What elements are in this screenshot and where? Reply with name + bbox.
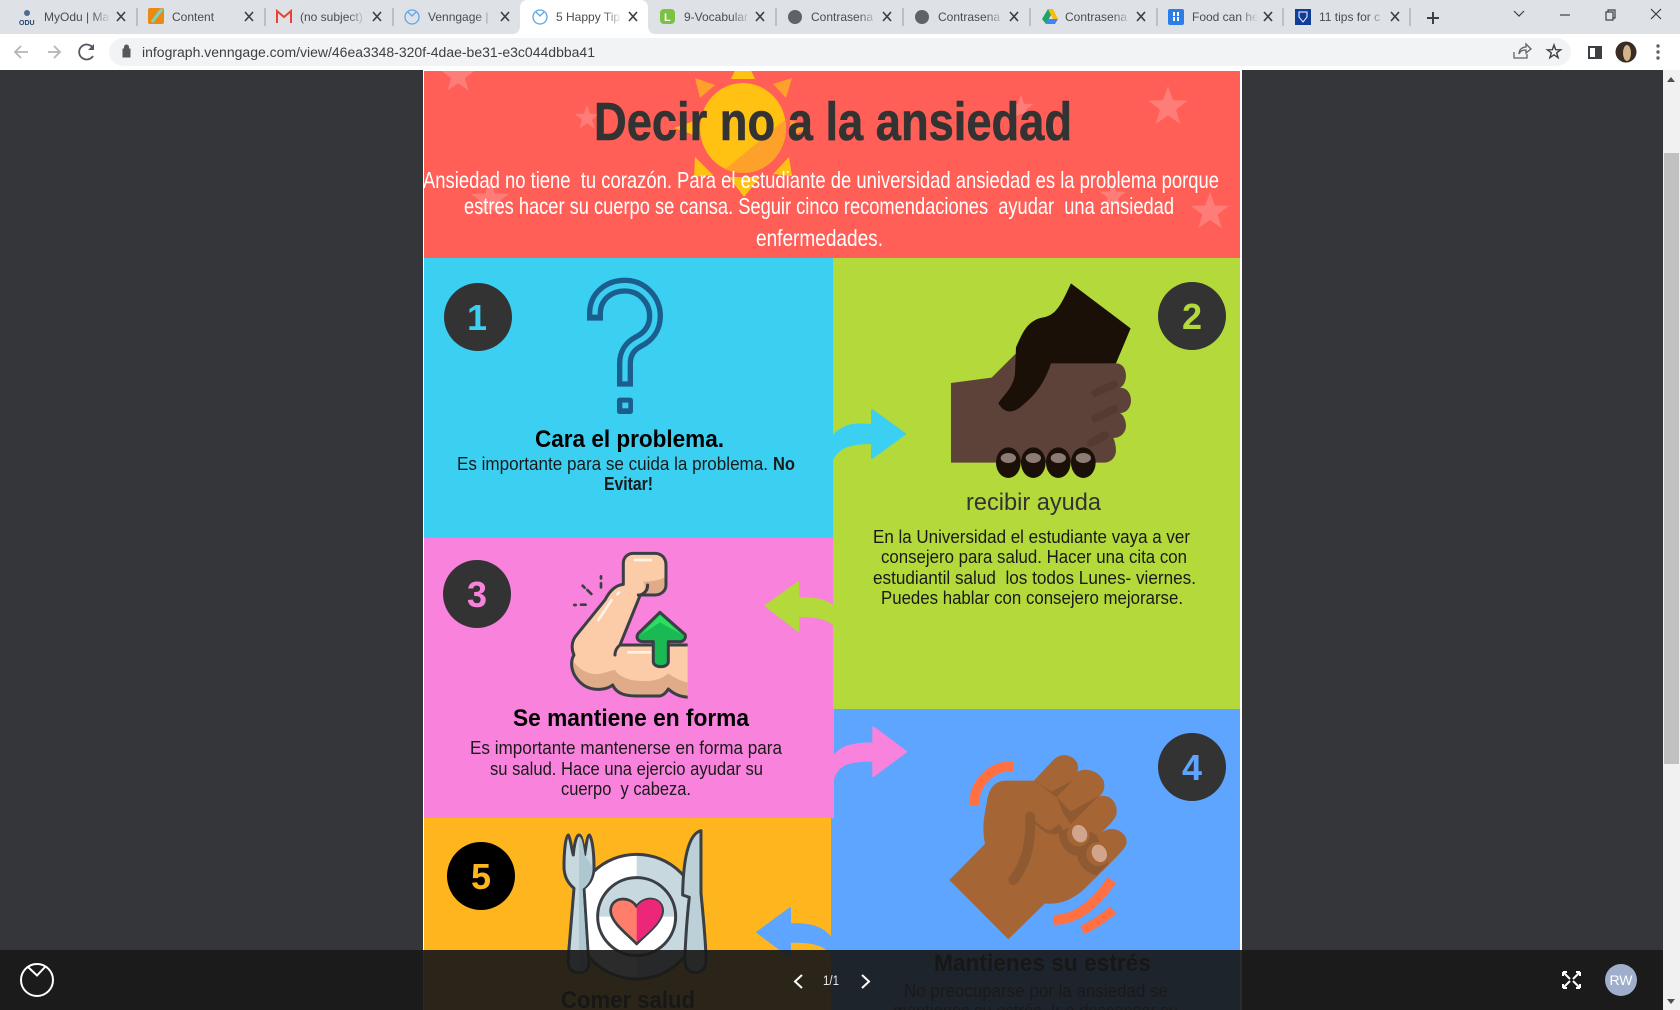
arrow: panel 1 to panel 2: [830, 410, 905, 458]
arrow: back from panel 4: [757, 908, 831, 957]
tab 1: MyOdu | Ma: [44, 10, 109, 24]
number badge 5: [447, 842, 515, 910]
page counter: 1/1: [823, 972, 839, 988]
number badge 4: [1158, 733, 1226, 801]
intro text: Ansiedad no tiene tu corazón. Para el estudiante de universidad ansiedad es la problema porque: [423, 167, 1219, 193]
body: stay in shape: su salud. Hace una ejercio ayudar su: [490, 759, 763, 779]
tab 11: 11 tips for c: [1319, 10, 1380, 24]
intro text: [423, 167, 1219, 251]
heading: get help: recibir ayuda: [966, 489, 1102, 516]
icon: fist: [949, 755, 1127, 939]
tab 9: [1042, 8, 1145, 26]
tab 3: [277, 8, 381, 26]
tab 8: Contrasena: [938, 10, 1000, 24]
number badge 2: 2: [1182, 296, 1202, 337]
new tab button: [1427, 12, 1439, 24]
body: face the problem: Es importante para se cuida la problema.: [457, 454, 768, 474]
next page arrow: [862, 975, 869, 988]
body: stress: No preocuparse por la ansiedad se: [904, 981, 1168, 1001]
tab 1: ODU: [19, 20, 35, 27]
tab separators: [137, 8, 1410, 26]
number badge 5: 5: [471, 856, 491, 897]
tab 6: L: [664, 12, 671, 24]
number badge 3: [443, 560, 511, 628]
tab 5 active: 5 Happy Tip: [556, 10, 620, 24]
number badge 3: 3: [467, 574, 487, 615]
viewer bottom bar: [0, 950, 1663, 1010]
tab 5 active: [533, 8, 637, 26]
body: stay in shape: Es importante mantenerse en forma para: [470, 738, 783, 758]
panel 2: get help: [833, 258, 1240, 709]
body: get help: Puedes hablar con consejero mejorarse.: [881, 588, 1183, 608]
decorative stars: [441, 58, 1229, 228]
fullscreen icon: [1563, 972, 1580, 988]
tab 9: Contrasena: [1065, 10, 1127, 24]
panel 4: stress: [831, 709, 1240, 1010]
tab 7: [788, 8, 891, 26]
tab 8: [915, 8, 1018, 26]
intro text: enfermedades.: [756, 225, 883, 251]
toolbar: [0, 34, 1680, 70]
lock icon: [123, 45, 130, 57]
body: get help: [873, 527, 1196, 608]
window controls: [1514, 9, 1661, 20]
number badge 2: [1158, 282, 1226, 350]
icon: hand holding hand: [951, 283, 1131, 478]
user avatar: [1605, 964, 1637, 996]
active tab: [512, 0, 656, 34]
body: stress: [893, 981, 1178, 1010]
toolbar actions: [1514, 42, 1660, 62]
tab 10: Food can he: [1192, 10, 1259, 24]
icon: plate with heart: [564, 831, 706, 979]
page scrollbar: [1663, 70, 1680, 1010]
tab 7: Contrasena: [811, 10, 873, 24]
tab 11: [1295, 8, 1399, 26]
arrow: panel 2 to panel 3: [766, 582, 833, 631]
panel 3: stay in shape: [424, 538, 834, 819]
title: Decir no a la ansiedad: [594, 92, 1072, 152]
previous page arrow: [795, 975, 802, 988]
url: infograph.venngage.com/view/46ea3348-320f-4dae-be31-e3c044dbba41: [142, 45, 595, 60]
tab 6: 9-Vocabular: [684, 10, 748, 24]
body: face the problem: Evitar!: [604, 474, 653, 494]
intro text: estres hacer su cuerpo se cansa. Seguir cinco recomendaciones ayudar una ansiedad: [464, 193, 1174, 219]
tab 3: (no subject): [300, 10, 363, 24]
browser chrome: [0, 0, 1680, 70]
body: face the problem: [457, 454, 795, 494]
panel 1: face the problem: [424, 258, 833, 538]
arrow: panel 3 to panel 4: [833, 727, 906, 778]
viewer logo: [21, 964, 53, 996]
panel 5: food: [424, 818, 831, 1010]
tab strip: [0, 0, 1680, 34]
tab 6: [660, 8, 764, 26]
icon: sun: [674, 68, 815, 197]
tab 4: [405, 8, 509, 26]
infographic page: [423, 58, 1242, 1010]
number badge 4: 4: [1182, 747, 1202, 788]
panel: header: [423, 58, 1240, 258]
body: stay in shape: cuerpo y cabeza.: [561, 779, 691, 799]
user avatar: RW: [1609, 972, 1633, 988]
heading: stay in shape: Se mantiene en forma: [513, 705, 750, 732]
address bar: [109, 38, 1571, 66]
tab 4: Venngage |: [428, 10, 489, 24]
body: stay in shape: [470, 738, 783, 799]
icon: question mark: [595, 286, 655, 414]
navigation buttons: [15, 44, 94, 60]
number badge 1: 1: [467, 297, 487, 338]
number badge 1: [444, 283, 512, 351]
tab 2: Content: [172, 10, 215, 24]
body: get help: En la Universidad el estudiante vaya a ver: [873, 527, 1190, 547]
tab 2: [148, 8, 253, 24]
icon: flexed arm with arrow: [571, 553, 692, 697]
tab 1: [19, 8, 125, 27]
body: get help: estudiantil salud los todos Lunes- viernes.: [873, 568, 1196, 588]
heading: face the problem: Cara el problema.: [535, 426, 724, 453]
heading: stress: Mantienes su estrés: [934, 950, 1151, 977]
body: get help: consejero para salud. Hacer una cita con: [881, 547, 1187, 567]
tab 10: [1168, 8, 1272, 26]
body: face the problem: No: [773, 454, 795, 474]
